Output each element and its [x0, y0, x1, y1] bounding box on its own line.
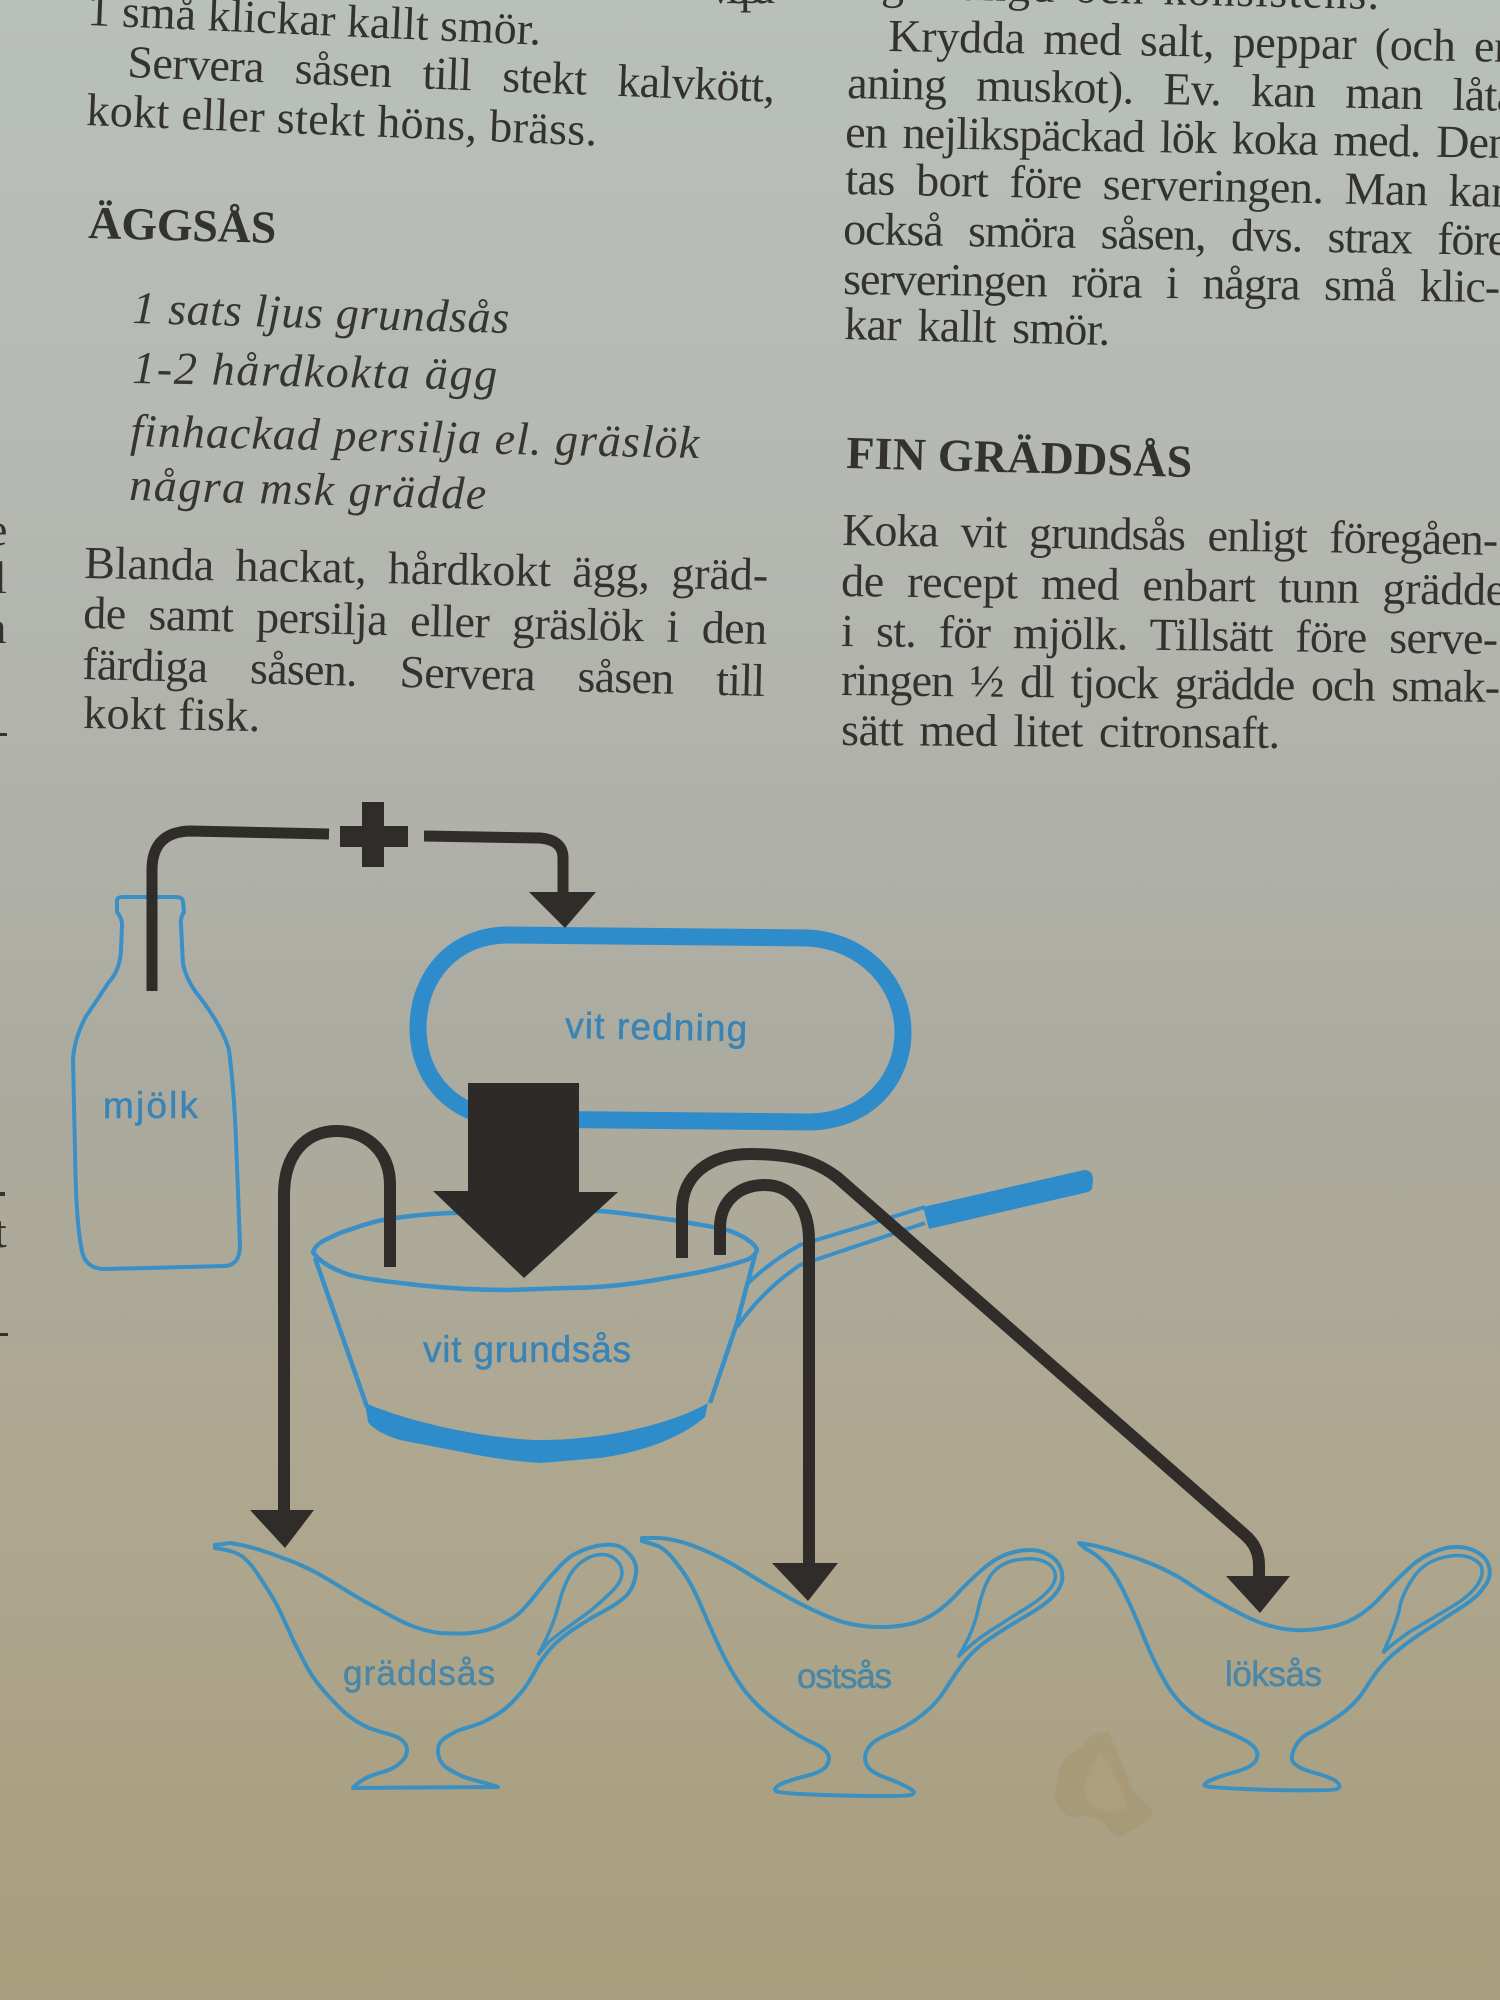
text block: left column top — [86, 0, 776, 155]
label: ostsås: ostsås — [797, 1657, 892, 1696]
text block: left column top: Servera såsen till stekt kalvkött, — [127, 36, 776, 112]
pan body — [315, 1255, 755, 1407]
ingredient list: äggsås — [129, 282, 701, 519]
text block: left column top: kokt eller stekt höns, bräss. — [86, 84, 598, 155]
text block: äggsås instructions: färdiga såsen. Servera såsen till — [82, 638, 766, 706]
text block: right column top: aning muskot). Ev. kan man låta — [847, 57, 1500, 121]
label: gräddsås: gräddsås — [343, 1654, 495, 1693]
text block: right column top: också smöra såsen, dvs. strax före — [843, 203, 1500, 265]
pan handle — [737, 1170, 1093, 1327]
big arrow: vit redning to vit grundsås — [433, 1083, 618, 1278]
pan base — [365, 1403, 708, 1463]
arrow: grundsås to ostsås — [720, 1185, 838, 1601]
label: mjölk: mjölk — [103, 1085, 198, 1126]
ingredient list: äggsås: finhackad persilja el. gräslök — [130, 405, 701, 468]
gravy boat: gräddsås — [215, 1543, 636, 1788]
stain on the paper — [1055, 1730, 1153, 1836]
text block: fin gräddsås instructions: ringen ½ dl tjock grädde och smak- — [841, 654, 1500, 712]
heading: ÄGGSÅS: ÄGGSÅS — [88, 197, 277, 253]
arrow: grundsås to gräddsås — [250, 1131, 390, 1548]
label: vit grundsås: vit grundsås — [423, 1329, 631, 1370]
heading: FIN GRÄDDSÅS: FIN GRÄDDSÅS — [846, 427, 1193, 487]
ingredient list: äggsås: 1 sats ljus grundsås — [132, 282, 510, 343]
text block: fin gräddsås instructions — [841, 504, 1500, 758]
text block: fin gräddsås instructions: Koka vit grundsås enligt föregåen- — [842, 504, 1499, 565]
text block: äggsås instructions: kokt fisk. — [83, 687, 261, 741]
pan rim — [313, 1211, 757, 1290]
text block: äggsås instructions — [82, 537, 769, 741]
text block: right column top: kar kallt smör. — [844, 298, 1111, 355]
text block: right column top: tas bort före serveringen. Man kan — [845, 153, 1500, 217]
label: löksås: löksås — [1225, 1655, 1322, 1694]
ingredient list: äggsås: 1-2 hårdkokta ägg — [132, 342, 498, 400]
text block: right column top: Krydda med salt, peppar (och en — [888, 10, 1500, 72]
text block: right column top — [843, 0, 1500, 355]
text block: äggsås instructions: Blanda hackat, hårdkokt ägg, gräd- — [84, 537, 769, 600]
text block: right column top: serveringen röra i några små klic- — [843, 253, 1500, 312]
text block: fin gräddsås instructions: de recept med enbart tunn grädde — [841, 555, 1500, 615]
text block: äggsås instructions: de samt persilja eller gräslök i den — [83, 587, 768, 654]
arrow: from milk bottle to plus — [152, 831, 329, 991]
gravy boat: löksås — [1079, 1543, 1490, 1790]
arrow: grundsås to löksås — [682, 1154, 1290, 1613]
arrow: plus to vit redning — [424, 836, 596, 928]
text block: right column top: en nejlikspäckad lök koka med. Den — [845, 106, 1500, 168]
gravy boat: ostsås — [642, 1538, 1062, 1796]
capsule: vit redning — [418, 935, 903, 1122]
icon: milk bottle — [73, 897, 240, 1269]
text block: fin gräddsås instructions: sätt med litet citronsaft. — [841, 704, 1280, 758]
icon: plus sign — [340, 802, 408, 867]
saucepan: vit grundsås — [313, 1170, 1093, 1463]
ingredient list: äggsås: några msk grädde — [129, 459, 487, 519]
text fragments: cropped left margin — [0, 504, 8, 1336]
label: vit redning: vit redning — [565, 1005, 748, 1049]
text block: fin gräddsås instructions: i st. för mjölk. Tillsätt före serve- — [841, 605, 1498, 664]
